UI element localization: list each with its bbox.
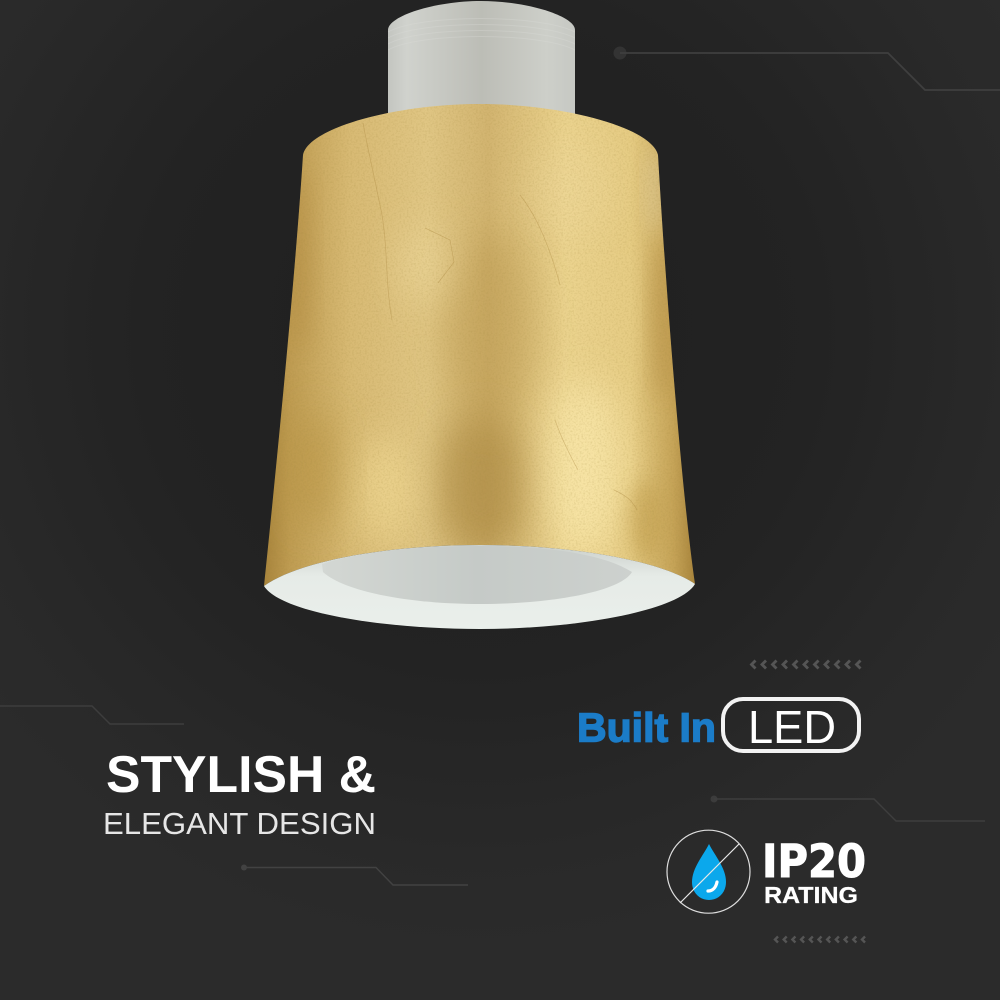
IP20 rating badge [667, 830, 866, 913]
circuit line: top right [614, 46, 1000, 90]
lamp: diffuser lens [322, 546, 632, 604]
built in LED label [577, 699, 859, 753]
text: RATING: RATING [764, 882, 858, 908]
text: Built In: Built In [577, 704, 716, 750]
lamp: white top cylinder [388, 1, 575, 115]
icon: crossed out water drop [667, 830, 750, 913]
circuit line: right middle [710, 796, 985, 821]
text: ELEGANT DESIGN: ELEGANT DESIGN [103, 806, 376, 841]
text: IP20: IP20 [762, 835, 866, 888]
chevrons: top right [752, 660, 860, 668]
lamp: gold leaf shade [260, 100, 700, 590]
text: LED: LED [748, 701, 836, 753]
heading: stylish and elegant design [103, 746, 376, 841]
text: STYLISH &: STYLISH & [106, 746, 376, 804]
lamp: shade inner rim [264, 545, 695, 629]
LED pill outline [723, 699, 859, 751]
lamp product illustration [260, 1, 700, 629]
circuit line: left lower [241, 864, 468, 885]
chevrons: bottom right [775, 936, 865, 942]
circuit line: left upper [0, 706, 184, 724]
